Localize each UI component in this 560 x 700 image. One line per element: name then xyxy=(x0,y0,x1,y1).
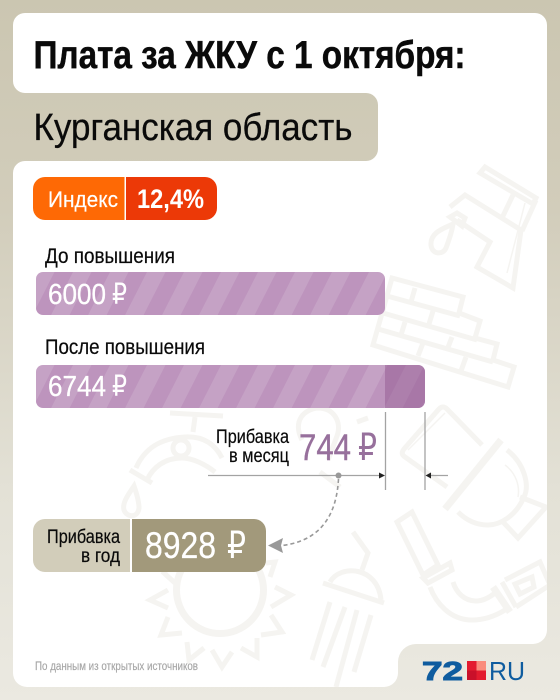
bar: after increase: 6744 xyxy=(48,371,106,403)
bar: before increase: ₽ xyxy=(112,279,127,311)
icon: sun xyxy=(150,546,291,667)
icon: tap with drop xyxy=(124,413,223,516)
icon: brick wall xyxy=(373,278,514,387)
dimension lines xyxy=(208,412,448,490)
index badge: Индекс xyxy=(48,187,118,212)
index badge xyxy=(33,177,217,220)
label: after increase: После повышения xyxy=(45,336,205,359)
arrow: monthly to yearly xyxy=(268,472,342,553)
background utility icons xyxy=(124,167,550,687)
region heading: Курганская область xyxy=(34,107,352,149)
monthly increase label: Прибавка xyxy=(216,427,289,448)
bar: after increase xyxy=(36,365,425,408)
monthly increase label: в месяц xyxy=(229,446,289,467)
label: before increase: До повышения xyxy=(45,245,175,268)
yearly increase badge: ₽ xyxy=(227,525,246,566)
icon: shower head xyxy=(312,532,384,687)
bar: before increase xyxy=(36,272,385,315)
source note: По данным из открытых источников xyxy=(35,661,198,673)
icon: pipe xyxy=(397,512,550,620)
title: Плата за ЖКУ с 1 октября: xyxy=(34,34,466,77)
icon: bulb xyxy=(298,408,368,487)
yearly increase badge xyxy=(33,519,266,572)
monthly increase label xyxy=(216,427,289,467)
bar: after increase: ₽ xyxy=(112,371,127,403)
bar: before increase: 6000 xyxy=(48,279,106,311)
monthly increase value: ₽ xyxy=(358,427,377,468)
icon: faucet xyxy=(431,167,536,288)
index badge: 12,4% xyxy=(137,184,204,214)
yearly increase badge: в год xyxy=(81,546,120,567)
logo: 72.RU: RU xyxy=(489,656,525,686)
yearly increase badge: 8928 xyxy=(145,525,216,566)
logo: 72.RU: 72 xyxy=(422,656,463,686)
monthly increase value: 744 xyxy=(299,427,351,468)
icon: tile and bowl xyxy=(402,407,546,538)
yearly increase badge: Прибавка xyxy=(47,527,120,548)
logo: 72.RU xyxy=(422,656,525,686)
